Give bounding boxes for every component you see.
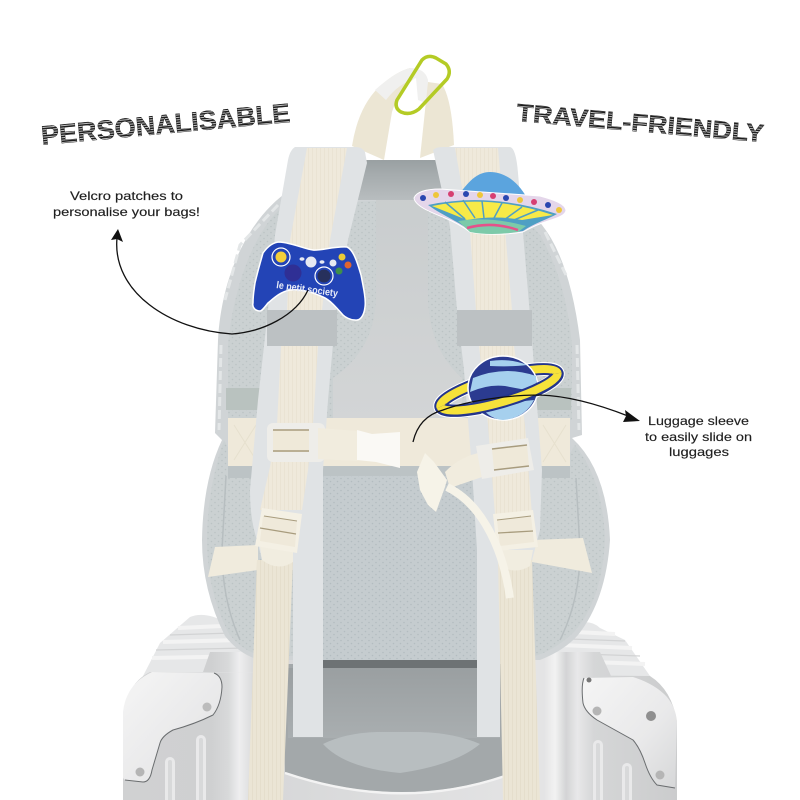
right lower lobe xyxy=(500,550,533,570)
left webbing xyxy=(287,148,347,310)
right webbing lower xyxy=(479,346,532,515)
left long strap xyxy=(248,560,293,800)
dark seam xyxy=(323,660,478,668)
controller buttons xyxy=(272,248,352,285)
mesh back xyxy=(228,195,572,420)
UFO hull xyxy=(428,200,557,233)
callout text: velcro patches: Velcro patches to xyxy=(70,189,183,203)
suitcase xyxy=(123,615,677,800)
right reflective patch xyxy=(457,310,532,346)
callout text: luggage sleeve: to easily slide on xyxy=(645,430,752,444)
trolley bar xyxy=(355,160,450,200)
callout text: luggage sleeve: Luggage sleeve xyxy=(648,414,749,428)
callout text: velcro patches: personalise your bags! xyxy=(53,205,200,219)
buckle male xyxy=(417,453,447,512)
left adjuster xyxy=(255,508,302,553)
right shoulder strap xyxy=(433,147,542,737)
left sternum strap xyxy=(318,428,358,461)
suitcase handle xyxy=(323,732,480,773)
planet ring front outline xyxy=(440,373,558,411)
heading: personalisable: PERSONALISABLE xyxy=(40,98,291,151)
controller logo text: le petit society xyxy=(276,280,339,300)
left webbing lower xyxy=(260,346,318,510)
loose strap xyxy=(447,487,510,598)
right sternum strap xyxy=(445,452,485,488)
central lower mesh xyxy=(323,476,478,660)
grey band xyxy=(228,466,570,478)
right side tab xyxy=(532,538,592,573)
planet ring front fill xyxy=(440,373,558,411)
left reflective patch xyxy=(267,310,337,346)
left side tab xyxy=(208,545,258,577)
heading: travel-friendly: TRAVEL-FRIENDLY xyxy=(515,99,765,148)
trolley well xyxy=(283,664,505,792)
arrow: controller to velcro text xyxy=(111,229,308,334)
buckle female xyxy=(357,430,400,468)
UFO yellow panels xyxy=(432,202,553,220)
lower seam xyxy=(285,773,505,793)
side bands xyxy=(226,388,571,410)
right corner guard xyxy=(582,677,677,788)
arrow: sleeve to luggage text xyxy=(413,395,640,442)
backpack xyxy=(202,68,610,800)
left lower lobe xyxy=(260,547,293,567)
left shoulder strap xyxy=(250,147,367,737)
UFO panel separators xyxy=(445,200,538,220)
callout text: luggage sleeve: luggages xyxy=(669,445,729,459)
patch: UFO xyxy=(414,172,566,234)
trolley well panel xyxy=(288,668,500,738)
patch: planet xyxy=(437,356,561,420)
UFO lights xyxy=(420,191,562,213)
right webbing xyxy=(455,148,512,310)
suitcase body xyxy=(123,672,677,800)
UFO pink arc xyxy=(467,225,518,230)
right adjuster xyxy=(493,510,538,551)
right lobe mesh xyxy=(500,445,605,656)
upper central panel xyxy=(333,190,462,420)
shell highlights xyxy=(219,205,579,430)
left sternum slider xyxy=(267,423,325,462)
suitcase ribs and screws xyxy=(136,678,664,800)
UFO saucer xyxy=(414,189,566,234)
suitcase rear ribs xyxy=(143,615,650,680)
planet stripes xyxy=(470,360,537,420)
left lobe mesh xyxy=(207,440,300,656)
patch: game controller xyxy=(253,242,365,320)
carabiner xyxy=(396,56,449,113)
left corner guard xyxy=(123,672,222,782)
suitcase top band xyxy=(203,652,612,678)
right sternum slider xyxy=(476,438,534,479)
UFO dome xyxy=(460,172,527,198)
chest band xyxy=(228,418,570,468)
planet ring back xyxy=(437,361,561,419)
right long strap xyxy=(498,560,540,800)
planet sphere xyxy=(468,356,538,420)
shell xyxy=(202,185,610,660)
UFO lower band xyxy=(458,219,526,234)
top handle xyxy=(352,68,454,160)
lobe folds xyxy=(222,476,580,640)
